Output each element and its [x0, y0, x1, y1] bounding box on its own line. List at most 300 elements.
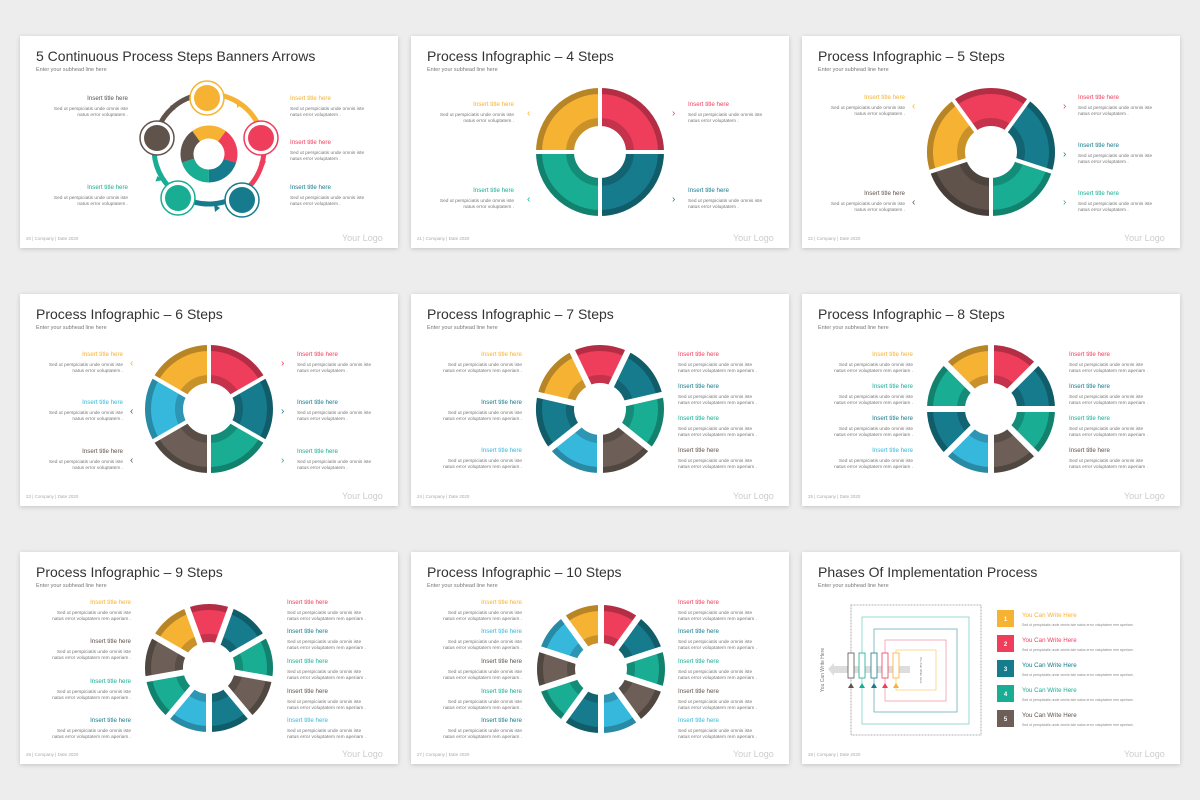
- nested squares diagram: [820, 605, 981, 735]
- text block: left 3: natus error voluptatem rem aperiam .: [443, 675, 522, 681]
- subhead: Enter your subhead line here: [818, 67, 889, 73]
- text block: right 2: Insert title here: [1078, 142, 1119, 149]
- text block: left 1: [443, 351, 523, 374]
- nested squares diagram: You Can Write Here: [820, 648, 826, 692]
- text block: left 2: Sed ut perspiciatis unde omnis iste: [57, 649, 131, 655]
- text block: left bottom: Insert title here: [473, 187, 515, 194]
- text block: right 2: [678, 628, 757, 651]
- text block: left 2: [831, 190, 915, 213]
- text block: left 2: Insert title here: [872, 383, 914, 390]
- text block: right 2: Insert title here: [290, 139, 331, 146]
- text block: right 3: [1063, 190, 1152, 213]
- footer: [417, 233, 774, 243]
- text block: right 1: [678, 599, 757, 622]
- text block: left 4: [443, 688, 523, 711]
- text block: right 3: natus error voluptatem .: [1078, 207, 1129, 213]
- text block: right 4: Insert title here: [1069, 447, 1110, 454]
- title: Process Infographic – 7 Steps: [427, 306, 614, 322]
- text block: right 2: natus error voluptatem .: [297, 416, 348, 422]
- text block: left 2: natus error voluptatem rem aperiam .: [443, 416, 522, 422]
- text block: left 1: Sed ut perspiciatis unde omnis iste: [448, 610, 522, 616]
- text block: left bottom: ‹: [527, 194, 530, 205]
- text block: left bottom: Insert title here: [87, 184, 129, 191]
- text block: left 3: Sed ut perspiciatis unde omnis iste: [839, 426, 913, 432]
- text block: left 2: Insert title here: [481, 399, 523, 406]
- numbered list: 2: [1004, 642, 1008, 648]
- text block: right 3: Sed ut perspiciatis unde omnis iste: [1069, 426, 1143, 432]
- title: Process Infographic – 8 Steps: [818, 306, 1005, 322]
- text block: right 3: natus error voluptatem rem aperiam .: [1069, 432, 1148, 438]
- text block: right 3: [287, 658, 366, 681]
- footer: 23 | Company | Date 2020: [26, 494, 79, 499]
- text block: left 2: [834, 383, 914, 406]
- text block: left 4: natus error voluptatem rem aperiam .: [443, 705, 522, 711]
- slide 7: 9 steps: [20, 552, 398, 764]
- ring chart 5: [896, 56, 1081, 240]
- text block: right 4: [678, 447, 757, 470]
- text block: left 2: Sed ut perspiciatis unde omnis iste: [839, 394, 913, 400]
- footer: 25 | Company | Date 2020: [808, 494, 861, 499]
- text block: right 1: Sed ut perspiciatis unde omnis iste: [287, 610, 361, 616]
- text block: left 1: ‹: [130, 358, 133, 369]
- text block: right 3: [290, 184, 364, 207]
- text block: right 2: ›: [281, 406, 284, 417]
- footer: 20 | Company | Date 2020: [26, 236, 79, 241]
- text block: left 2: Insert title here: [864, 190, 906, 197]
- text block: left 1: [443, 599, 523, 622]
- text block: right bottom: natus error voluptatem .: [688, 204, 739, 210]
- text block: right 1: [1063, 94, 1152, 117]
- text block: right 3: Sed ut perspiciatis unde omnis iste: [287, 669, 361, 675]
- text block: right 5: Insert title here: [678, 717, 719, 724]
- text block: left 3: [49, 448, 133, 471]
- numbered list: You Can Write Here: [1022, 637, 1077, 644]
- text block: right 3: Insert title here: [678, 658, 719, 665]
- text block: right 4: Sed ut perspiciatis unde omnis iste: [287, 699, 361, 705]
- text block: left 2: [443, 628, 523, 651]
- text block: right 2: [678, 383, 757, 406]
- footer: 22 | Company | Date 2020: [808, 236, 861, 241]
- text block: right bottom: Insert title here: [688, 187, 729, 194]
- text block: left 5: natus error voluptatem rem aperiam .: [443, 734, 522, 740]
- text block: right 1: Sed ut perspiciatis unde omnis iste: [678, 362, 752, 368]
- footer: [417, 749, 774, 759]
- text block: right 1: natus error voluptatem .: [290, 112, 341, 118]
- text block: left 2: ‹: [912, 197, 915, 208]
- footer: [808, 491, 1165, 501]
- text block: right 1: natus error voluptatem .: [1078, 111, 1129, 117]
- text block: right 5: [678, 717, 757, 740]
- title: Process Infographic – 5 Steps: [818, 48, 1005, 64]
- text block: left 1: Sed ut perspiciatis unde omnis iste: [839, 362, 913, 368]
- text block: right 1: Sed ut perspiciatis unde omnis iste: [1078, 105, 1152, 111]
- text block: right 2: Sed ut perspiciatis unde omnis iste: [1078, 153, 1152, 159]
- text block: left 4: Sed ut perspiciatis unde omnis iste: [448, 699, 522, 705]
- text block: left 3: Insert title here: [872, 415, 914, 422]
- text block: left 3: natus error voluptatem rem aperiam .: [834, 432, 913, 438]
- text block: right 3: Sed ut perspiciatis unde omnis iste: [297, 459, 371, 465]
- text block: left 3: Sed ut perspiciatis unde omnis iste: [448, 669, 522, 675]
- subhead: Enter your subhead line here: [427, 67, 498, 73]
- text block: right 3: ›: [281, 455, 284, 466]
- text block: right 3: [678, 658, 757, 681]
- title: 5 Continuous Process Steps Banners Arrows: [36, 48, 315, 64]
- nested squares diagram: You Can Write Here: [919, 657, 923, 684]
- footer: [808, 749, 1165, 759]
- text block: left top: natus error voluptatem .: [463, 118, 514, 124]
- text block: right 2: Insert title here: [1069, 383, 1110, 390]
- text block: right 1: Insert title here: [297, 351, 338, 358]
- text block: left 1: Insert title here: [481, 599, 523, 606]
- text block: right 2: Sed ut perspiciatis unde omnis iste: [1069, 394, 1143, 400]
- footer: Your Logo: [342, 233, 383, 243]
- text block: right 1: Sed ut perspiciatis unde omnis iste: [678, 610, 752, 616]
- text block: left 3: Sed ut perspiciatis unde omnis iste: [448, 458, 522, 464]
- text block: left 1: Insert title here: [864, 94, 906, 101]
- text block: right 2: natus error voluptatem .: [290, 156, 341, 162]
- text block: left 4: Insert title here: [481, 688, 523, 695]
- text block: right 2: [290, 139, 364, 162]
- footer: Your Logo: [1124, 749, 1165, 759]
- title: Process Infographic – 9 Steps: [36, 564, 223, 580]
- text block: left 3: [443, 658, 523, 681]
- text block: right 3: Insert title here: [297, 448, 338, 455]
- text block: left 2: Insert title here: [82, 399, 124, 406]
- text block: right bottom: ›: [672, 194, 675, 205]
- text block: right 1: Sed ut perspiciatis unde omnis iste: [297, 362, 371, 368]
- slide 5: 7 steps: [411, 294, 789, 506]
- text block: right 5: [287, 717, 366, 740]
- text block: right 1: Insert title here: [290, 95, 331, 102]
- text block: left 4: [52, 717, 132, 740]
- text block: left 2: natus error voluptatem .: [854, 207, 905, 213]
- numbered list: 5: [1004, 717, 1008, 723]
- text block: left 4: natus error voluptatem rem aperiam .: [52, 734, 131, 740]
- text block: left top: Sed ut perspiciatis unde omnis iste: [54, 106, 128, 112]
- footer: Your Logo: [342, 749, 383, 759]
- footer: Your Logo: [342, 491, 383, 501]
- text block: right 2: Sed ut perspiciatis unde omnis iste: [290, 150, 364, 156]
- text block: right 3: Insert title here: [678, 415, 719, 422]
- text block: right 1: Insert title here: [1069, 351, 1110, 358]
- text block: left top: natus error voluptatem .: [77, 112, 128, 118]
- text block: left 1: ‹: [912, 101, 915, 112]
- text block: right 3: natus error voluptatem rem aperiam .: [678, 432, 757, 438]
- text block: right 3: natus error voluptatem .: [297, 465, 348, 471]
- text block: right 1: [290, 95, 364, 118]
- ring chart 6: [148, 339, 270, 479]
- text block: right 2: Sed ut perspiciatis unde omnis iste: [297, 410, 371, 416]
- text block: right 1: [281, 351, 371, 374]
- text block: left 5: [443, 717, 523, 740]
- text block: right 5: natus error voluptatem rem aperiam .: [287, 734, 366, 740]
- text block: left 5: Sed ut perspiciatis unde omnis iste: [448, 728, 522, 734]
- ring chart 10: [534, 599, 668, 739]
- text block: left 3: Insert title here: [481, 447, 523, 454]
- text block: right 4: [678, 688, 757, 711]
- text block: left 1: [834, 351, 914, 374]
- footer: Your Logo: [733, 491, 774, 501]
- subhead: Enter your subhead line here: [818, 583, 889, 589]
- text block: right 3: [1069, 415, 1148, 438]
- text block: left bottom: natus error voluptatem .: [77, 201, 128, 207]
- text block: right 4: natus error voluptatem rem aperiam .: [678, 464, 757, 470]
- text block: right 2: Insert title here: [678, 628, 719, 635]
- footer: Your Logo: [1124, 233, 1165, 243]
- text block: left 4: natus error voluptatem rem aperiam .: [834, 464, 913, 470]
- text block: right 3: Sed ut perspiciatis unde omnis iste: [290, 195, 364, 201]
- text block: right top: natus error voluptatem .: [688, 118, 739, 124]
- text block: left 3: Sed ut perspiciatis unde omnis iste: [49, 459, 123, 465]
- numbered list: 3: [1004, 667, 1008, 673]
- text block: left bottom: Sed ut perspiciatis unde omnis iste: [54, 195, 128, 201]
- text block: left 2: [443, 399, 523, 422]
- text block: left 2: natus error voluptatem rem aperiam .: [443, 645, 522, 651]
- text block: right 3: Insert title here: [1069, 415, 1110, 422]
- text block: left 3: natus error voluptatem rem aperiam .: [443, 464, 522, 470]
- numbered list: You Can Write Here: [1022, 712, 1077, 719]
- text block: right 2: Sed ut perspiciatis unde omnis iste: [678, 394, 752, 400]
- text block: left top: Insert title here: [87, 95, 129, 102]
- text block: left 2: natus error voluptatem rem aperiam .: [834, 400, 913, 406]
- text block: left 3: Insert title here: [481, 658, 523, 665]
- slide 3: 5 steps: [802, 36, 1180, 248]
- text block: right 1: [678, 351, 757, 374]
- text block: left bottom: [54, 184, 129, 207]
- text block: right 4: Insert title here: [678, 447, 719, 454]
- subhead: Enter your subhead line here: [427, 583, 498, 589]
- text block: right 1: Insert title here: [678, 351, 719, 358]
- text block: right 1: natus error voluptatem .: [297, 368, 348, 374]
- text block: left 2: Insert title here: [481, 628, 523, 635]
- text block: left 1: Sed ut perspiciatis unde omnis iste: [831, 105, 905, 111]
- text block: right 3: [281, 448, 371, 471]
- text block: right 1: natus error voluptatem rem aperiam .: [678, 616, 757, 622]
- text block: right 2: Insert title here: [678, 383, 719, 390]
- text block: right 2: natus error voluptatem rem aperiam .: [1069, 400, 1148, 406]
- text block: right bottom: Sed ut perspiciatis unde omnis iste: [688, 198, 762, 204]
- text block: left 4: Insert title here: [90, 717, 132, 724]
- text block: right 4: Insert title here: [678, 688, 719, 695]
- text block: left 2: [52, 638, 132, 661]
- text block: right 2: natus error voluptatem .: [1078, 159, 1129, 165]
- text block: right 1: Sed ut perspiciatis unde omnis iste: [1069, 362, 1143, 368]
- numbered list: You Can Write Here: [1022, 687, 1077, 694]
- text block: left 1: natus error voluptatem rem aperiam .: [52, 616, 131, 622]
- text block: right 2: [1069, 383, 1148, 406]
- text block: right 4: [1069, 447, 1148, 470]
- slide 2: 4 steps: [411, 36, 789, 248]
- text block: left 2: Insert title here: [90, 638, 132, 645]
- text block: left 3: natus error voluptatem rem aperiam .: [52, 695, 131, 701]
- text block: right 3: natus error voluptatem .: [290, 201, 341, 207]
- numbered list: Sed ut perspiciatis unde omnis iste natus error voluptatem rem aperiam .: [1022, 623, 1135, 627]
- footer: Your Logo: [733, 233, 774, 243]
- text block: left 4: [834, 447, 914, 470]
- subhead: Enter your subhead line here: [36, 583, 107, 589]
- ring chart 9: [120, 579, 296, 753]
- text block: left 1: Insert title here: [481, 351, 523, 358]
- text block: right 2: [1063, 142, 1152, 165]
- title: Process Infographic – 6 Steps: [36, 306, 223, 322]
- text block: right 3: Sed ut perspiciatis unde omnis iste: [678, 426, 752, 432]
- text block: left 1: Insert title here: [90, 599, 132, 606]
- text block: right 2: Insert title here: [287, 628, 328, 635]
- text block: left 3: ‹: [130, 455, 133, 466]
- text block: left 3: Insert title here: [90, 678, 132, 685]
- slide 1: 5 continuous process steps: [20, 36, 398, 248]
- title: Phases Of Implementation Process: [818, 564, 1037, 580]
- footer: 24 | Company | Date 2020: [417, 494, 470, 499]
- numbered list: You Can Write Here: [1022, 612, 1077, 619]
- subhead: Enter your subhead line here: [36, 325, 107, 331]
- text block: right 2: Insert title here: [297, 399, 338, 406]
- text block: right 4: natus error voluptatem rem aperiam .: [287, 705, 366, 711]
- text block: left 1: Sed ut perspiciatis unde omnis iste: [49, 362, 123, 368]
- text block: right 3: Insert title here: [290, 184, 331, 191]
- numbered list: You Can Write Here: [1022, 662, 1077, 669]
- text block: left top: [54, 95, 129, 118]
- text block: left top: [440, 101, 530, 124]
- text block: right 2: natus error voluptatem rem aperiam .: [678, 645, 757, 651]
- text block: right top: ›: [672, 108, 675, 119]
- text block: right 1: ›: [281, 358, 284, 369]
- text block: left top: ‹: [527, 108, 530, 119]
- text block: right 2: Sed ut perspiciatis unde omnis iste: [287, 639, 361, 645]
- text block: right 5: Sed ut perspiciatis unde omnis iste: [287, 728, 361, 734]
- ring chart 8: [921, 339, 1061, 479]
- slide 8: 10 steps: [411, 552, 789, 764]
- text block: right 1: Sed ut perspiciatis unde omnis iste: [290, 106, 364, 112]
- text block: right 3: Insert title here: [1078, 190, 1119, 197]
- text block: left 1: [52, 599, 132, 622]
- text block: left 1: Insert title here: [82, 351, 124, 358]
- text block: right 4: [287, 688, 366, 711]
- numbered list: Sed ut perspiciatis unde omnis iste natus error voluptatem rem aperiam .: [1022, 698, 1135, 702]
- footer: [26, 491, 383, 501]
- text block: left 1: natus error voluptatem rem aperiam .: [443, 368, 522, 374]
- numbered list: Sed ut perspiciatis unde omnis iste natus error voluptatem rem aperiam .: [1022, 673, 1135, 677]
- numbered list: 4: [1004, 692, 1008, 698]
- text block: left 4: Sed ut perspiciatis unde omnis iste: [57, 728, 131, 734]
- text block: right top: Insert title here: [688, 101, 729, 108]
- text block: left bottom: [440, 187, 530, 210]
- text block: left 3: Insert title here: [82, 448, 124, 455]
- text block: left 1: natus error voluptatem rem aperiam .: [443, 616, 522, 622]
- text block: right 1: natus error voluptatem rem aperiam .: [1069, 368, 1148, 374]
- text block: right 3: Insert title here: [287, 658, 328, 665]
- ring chart 7: [508, 316, 689, 495]
- footer: 26 | Company | Date 2020: [26, 752, 79, 757]
- subhead: Enter your subhead line here: [818, 325, 889, 331]
- text block: left 1: [831, 94, 915, 117]
- text block: left 1: natus error voluptatem rem aperiam .: [834, 368, 913, 374]
- text block: right 2: Sed ut perspiciatis unde omnis iste: [678, 639, 752, 645]
- text block: left top: Insert title here: [473, 101, 515, 108]
- slide 4: 6 steps: [20, 294, 398, 506]
- footer: 28 | Company | Date 2020: [808, 752, 861, 757]
- text block: right 1: [287, 599, 366, 622]
- text block: left 1: [49, 351, 133, 374]
- footer: [26, 233, 383, 243]
- text block: right 3: [678, 415, 757, 438]
- text block: right 4: Sed ut perspiciatis unde omnis iste: [1069, 458, 1143, 464]
- text block: right 4: Sed ut perspiciatis unde omnis iste: [678, 458, 752, 464]
- text block: left 2: natus error voluptatem .: [72, 416, 123, 422]
- text block: right 1: Insert title here: [678, 599, 719, 606]
- text block: right 1: Insert title here: [1078, 94, 1119, 101]
- text block: left bottom: natus error voluptatem .: [463, 204, 514, 210]
- text block: right top: Sed ut perspiciatis unde omnis iste: [688, 112, 762, 118]
- text block: right 4: Sed ut perspiciatis unde omnis iste: [678, 699, 752, 705]
- text block: left 5: Insert title here: [481, 717, 523, 724]
- text block: left 2: Sed ut perspiciatis unde omnis iste: [49, 410, 123, 416]
- ring chart 4: [530, 82, 670, 222]
- text block: left 1: Sed ut perspiciatis unde omnis iste: [57, 610, 131, 616]
- text block: right 2: natus error voluptatem rem aperiam .: [287, 645, 366, 651]
- text block: left 3: Sed ut perspiciatis unde omnis iste: [57, 689, 131, 695]
- text block: left 4: Sed ut perspiciatis unde omnis iste: [839, 458, 913, 464]
- text block: right 4: natus error voluptatem rem aperiam .: [1069, 464, 1148, 470]
- footer: 21 | Company | Date 2020: [417, 236, 470, 241]
- text block: left 2: natus error voluptatem rem aperiam .: [52, 655, 131, 661]
- text block: left 2: Sed ut perspiciatis unde omnis iste: [448, 639, 522, 645]
- text block: left 2: [49, 399, 133, 422]
- text block: left bottom: Sed ut perspiciatis unde omnis iste: [440, 198, 514, 204]
- text block: left 1: Sed ut perspiciatis unde omnis iste: [448, 362, 522, 368]
- text block: left 1: natus error voluptatem .: [854, 111, 905, 117]
- slide 9: phases of implementation: [802, 552, 1180, 764]
- title: Process Infographic – 10 Steps: [427, 564, 622, 580]
- footer: [417, 491, 774, 501]
- text block: right 4: natus error voluptatem rem aperiam .: [678, 705, 757, 711]
- text block: right 3: natus error voluptatem rem aperiam .: [287, 675, 366, 681]
- subhead: Enter your subhead line here: [427, 325, 498, 331]
- footer: Your Logo: [733, 749, 774, 759]
- numbered list: 1: [1004, 617, 1008, 623]
- text block: right 2: natus error voluptatem rem aperiam .: [678, 400, 757, 406]
- text block: left 3: [443, 447, 523, 470]
- cycle diagram: [140, 81, 278, 217]
- text block: left 2: Sed ut perspiciatis unde omnis iste: [448, 410, 522, 416]
- text block: right 4: Insert title here: [287, 688, 328, 695]
- text block: left 3: [834, 415, 914, 438]
- numbered list: Sed ut perspiciatis unde omnis iste natus error voluptatem rem aperiam .: [1022, 723, 1135, 727]
- numbered list: [997, 610, 1135, 727]
- text block: right 1: natus error voluptatem rem aperiam .: [678, 368, 757, 374]
- text block: right 1: natus error voluptatem rem aperiam .: [287, 616, 366, 622]
- text block: right 1: ›: [1063, 101, 1066, 112]
- numbered list: Sed ut perspiciatis unde omnis iste natus error voluptatem rem aperiam .: [1022, 648, 1135, 652]
- subhead: Enter your subhead line here: [36, 67, 107, 73]
- text block: right 5: Sed ut perspiciatis unde omnis iste: [678, 728, 752, 734]
- text block: right 1: [1069, 351, 1148, 374]
- slide 6: 8 steps: [802, 294, 1180, 506]
- text block: right 5: natus error voluptatem rem aperiam .: [678, 734, 757, 740]
- text block: right 2: [281, 399, 371, 422]
- text block: left 1: Insert title here: [872, 351, 914, 358]
- text block: right 5: Insert title here: [287, 717, 328, 724]
- text block: right 2: [287, 628, 366, 651]
- text block: right 2: ›: [1063, 149, 1066, 160]
- text block: right bottom: [672, 187, 762, 210]
- text block: right 3: natus error voluptatem rem aperiam .: [678, 675, 757, 681]
- footer: [26, 749, 383, 759]
- text block: left 2: ‹: [130, 406, 133, 417]
- text block: left 4: Insert title here: [872, 447, 914, 454]
- text block: left top: Sed ut perspiciatis unde omnis iste: [440, 112, 514, 118]
- footer: 27 | Company | Date 2020: [417, 752, 470, 757]
